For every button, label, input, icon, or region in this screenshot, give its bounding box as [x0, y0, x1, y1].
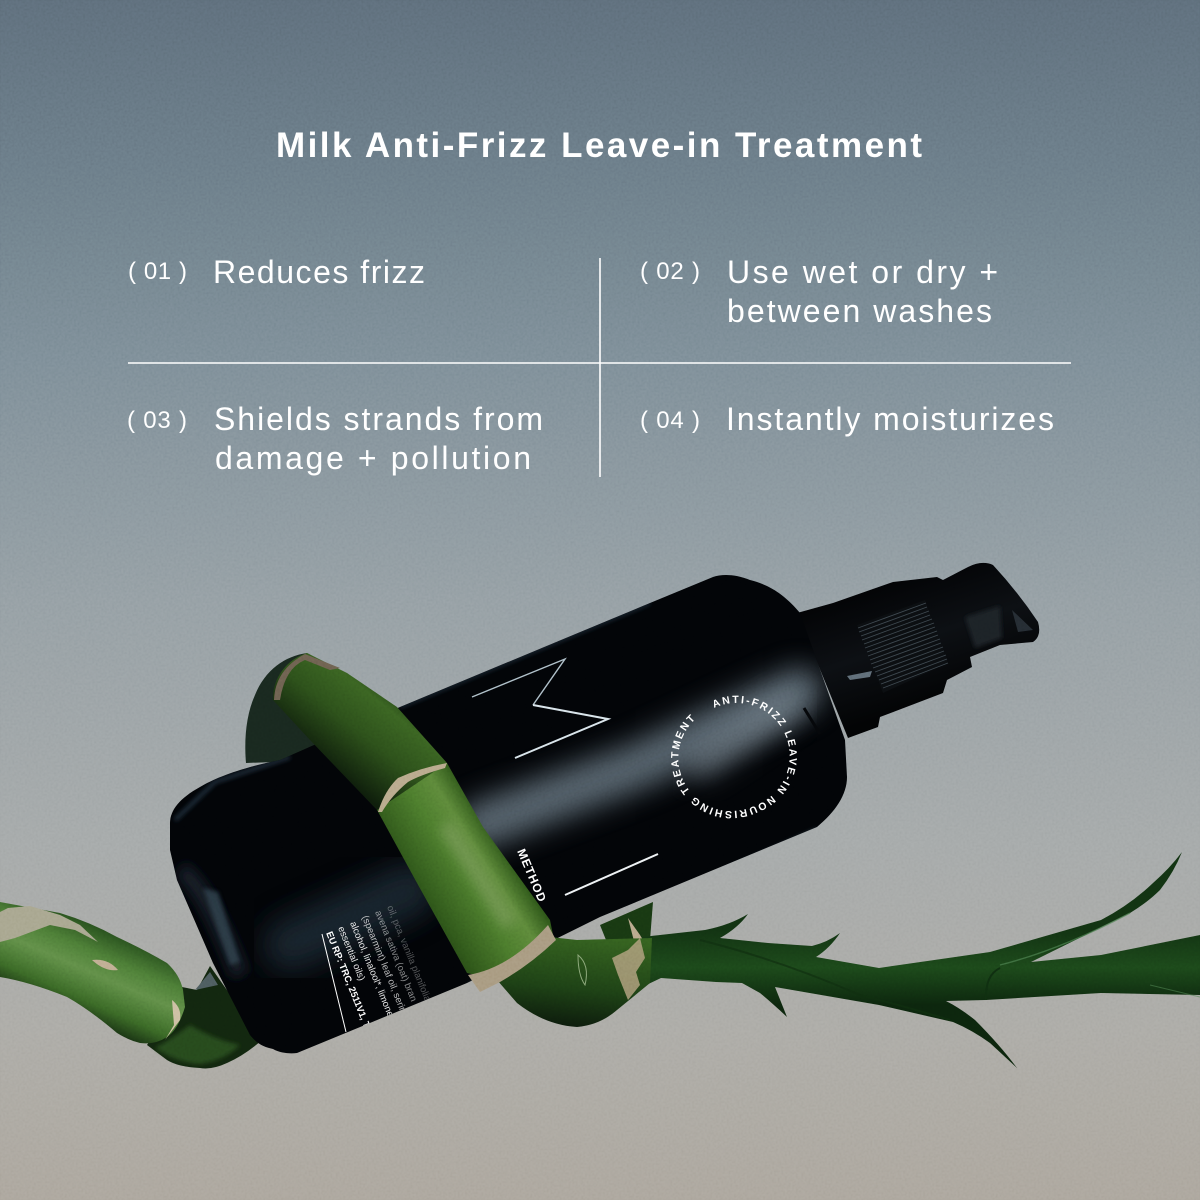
benefit 02 — [640, 254, 998, 329]
benefit 04: Instantly moisturizes — [726, 401, 1054, 437]
ingredients text — [322, 904, 433, 1040]
bamboo main tube — [273, 653, 556, 992]
circular label text: ANTI-FRIZZ LEAVE-IN NOURISHING TREATMENT — [671, 696, 797, 818]
bamboo node rings — [378, 763, 447, 812]
benefit 03: damage + pollution — [215, 440, 531, 476]
bamboo stem and leaves — [600, 852, 1200, 1068]
bottle pump and collar — [797, 563, 1039, 738]
benefit 04: ( 04 ) — [640, 407, 700, 434]
ingredients text: (spearmint) leaf oil, serine — [359, 914, 410, 1019]
benefit 01: Reduces frizz — [213, 254, 425, 290]
bamboo back loop — [245, 653, 340, 763]
benefit 02: ( 02 ) — [640, 258, 700, 285]
divider lines — [128, 258, 1071, 477]
pump ribbed collar — [857, 600, 948, 693]
benefit 02: between washes — [727, 293, 992, 329]
benefit 01: ( 01 ) — [128, 258, 187, 285]
benefit 03: ( 03 ) — [127, 407, 187, 434]
ingredients text: avena sativa (oat) bran — [372, 909, 419, 1003]
ingredients text: essential oils) — [335, 925, 367, 982]
logo mark — [472, 659, 658, 895]
bamboo left segment dark — [147, 966, 262, 1068]
ingredients text: EU RP: TRC, 2511V1, The — [323, 930, 376, 1040]
bamboo second segment — [497, 937, 652, 1027]
benefit 03 — [127, 401, 543, 476]
ingredients text: oil, pca, vanilla planifolia — [384, 904, 433, 1004]
bamboo left segment — [0, 902, 185, 1043]
title: Milk Anti-Frizz Leave-in Treatment — [276, 126, 922, 165]
bottle — [170, 562, 1040, 1054]
benefits grid — [127, 254, 1071, 477]
ingredients text: alcohol, linalool*, limone* — [347, 920, 397, 1022]
benefit 02: Use wet or dry + — [727, 254, 998, 290]
benefit 03: Shields strands from — [214, 401, 543, 437]
bottle body — [170, 575, 847, 1054]
brand text: METHOD — [514, 847, 549, 904]
